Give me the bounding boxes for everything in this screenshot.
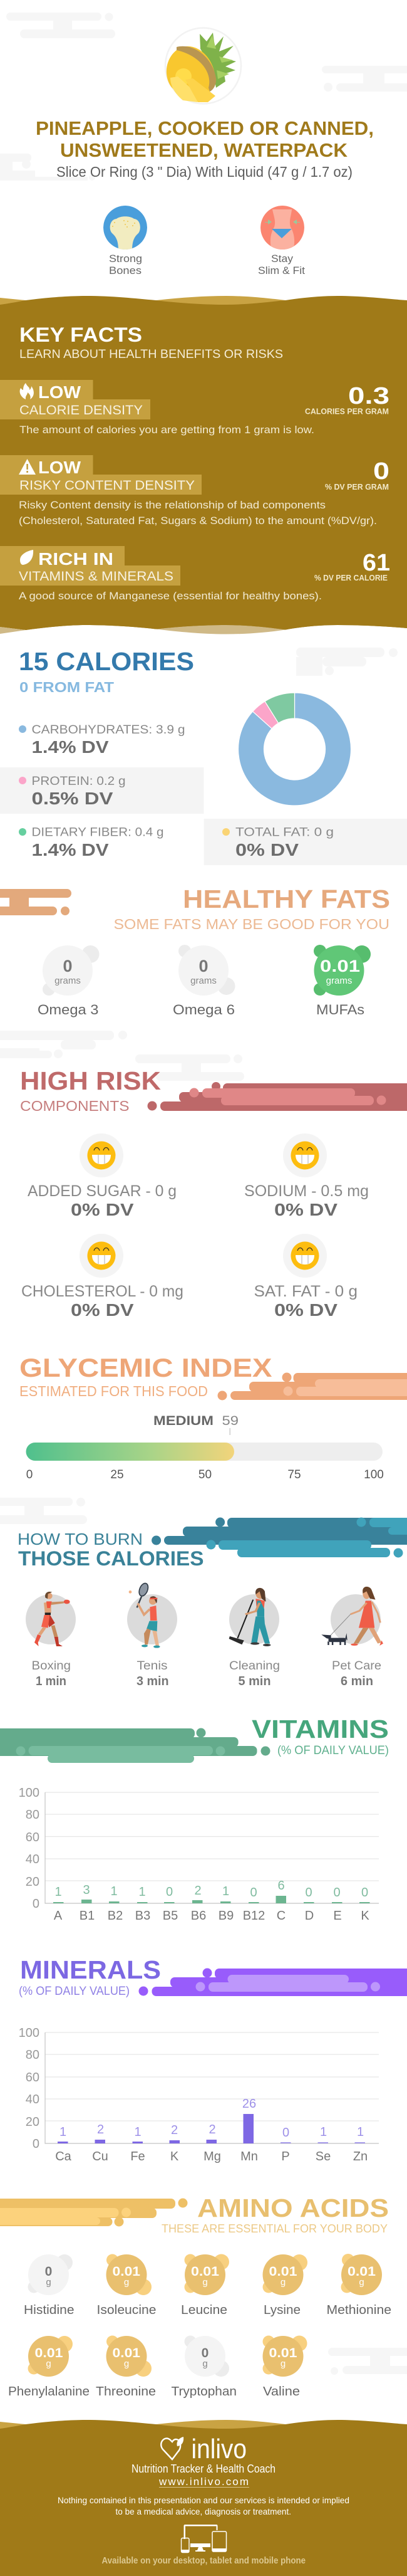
value labels — [59, 2097, 364, 2140]
badge: leucine: g — [202, 2277, 208, 2288]
badge: methionine: 0.01 — [348, 2264, 376, 2279]
bars — [53, 1896, 369, 1903]
y axis labels: 60 — [26, 1831, 39, 1844]
title: PINEAPPLE, COOKED OR CANNED, — [36, 117, 374, 139]
value labels: 1 — [59, 2125, 66, 2139]
badge: histidine — [24, 2254, 74, 2317]
badge: histidine: 0 — [45, 2264, 52, 2279]
category labels: K — [361, 1909, 369, 1923]
label: Tenis — [137, 1659, 168, 1673]
badge: threonine: Threonine — [96, 2385, 156, 2399]
value labels: 2 — [171, 2123, 178, 2137]
badge: lysine: Lysine — [264, 2303, 301, 2317]
item: sodium — [244, 1133, 369, 1219]
badge: omega 3: Omega 3 — [38, 1002, 99, 1017]
heading: 15 calories: 15 CALORIES — [19, 647, 194, 676]
chart: vitamins bar chart — [19, 1786, 379, 1923]
y axis labels: 60 — [26, 2071, 39, 2084]
label: 6 min — [341, 1674, 373, 1688]
y axis labels: 80 — [26, 2048, 39, 2062]
icon: strong bones — [103, 206, 147, 251]
label — [31, 1659, 71, 1688]
badge: methionine — [327, 2254, 391, 2317]
badge: leucine — [181, 2254, 229, 2317]
badge: lysine: g — [281, 2277, 286, 2288]
stat: calories per gram — [305, 383, 389, 416]
y axis labels: 100 — [19, 1786, 39, 1800]
tab label: risky content density: RISKY CONTENT DENSITY — [19, 478, 195, 493]
item: added sugar: 0% DV — [71, 1200, 134, 1219]
icon: desktop, tablet and phone — [182, 2525, 227, 2553]
badge: histidine: g — [46, 2277, 51, 2288]
gauge axis labels: 25 — [110, 1468, 124, 1481]
badge: tryptophan: 0 — [202, 2346, 209, 2360]
chart: minerals bar chart — [19, 2026, 379, 2163]
item: cholesterol: 0% DV — [71, 1300, 134, 1320]
panel: healthy fats — [0, 885, 390, 1017]
description: The amount of calories you are getting from 1 gram is low. — [19, 424, 314, 436]
item: sodium: 0% DV — [274, 1200, 337, 1219]
badge: valine — [263, 2336, 307, 2399]
badge: phenylalanine: g — [46, 2358, 51, 2369]
value labels: 1 — [222, 1885, 229, 1898]
value labels: 3 — [83, 1883, 90, 1897]
value labels: 0 — [333, 1886, 341, 1900]
label: stay slim and fit — [258, 253, 305, 276]
logo: inlivo — [161, 2434, 247, 2464]
subtitle: serving size: Slice Or Ring (3 " Dia) With Liquid (47 g / 1.7 oz) — [56, 164, 353, 180]
heading: key facts: KEY FACTS — [19, 323, 142, 346]
item: cholesterol — [21, 1234, 183, 1320]
label: 3 min — [137, 1674, 169, 1688]
value labels: 2 — [97, 2123, 104, 2137]
item: saturated fat: SAT. FAT - 0 g — [254, 1283, 358, 1300]
item: added sugar: ADDED SUGAR - 0 g — [28, 1182, 177, 1200]
gauge axis labels: 0 — [26, 1468, 33, 1481]
label: 1 min — [36, 1674, 66, 1688]
badge: leucine: 0.01 — [191, 2264, 219, 2279]
description: A good source of Manganese (essential for healthy bones). — [19, 590, 322, 602]
item: cholesterol: CHOLESTEROL - 0 mg — [21, 1283, 183, 1300]
heading: GLYCEMIC INDEX — [19, 1353, 272, 1382]
badge: phenylalanine — [8, 2336, 90, 2399]
activity: cleaning — [229, 1588, 280, 1688]
subheading: ESTIMATED FOR THIS FOOD — [19, 1383, 208, 1399]
decorative band — [218, 1373, 407, 1401]
category labels: K — [170, 2150, 179, 2163]
value labels — [54, 1879, 368, 1900]
fact: risky content density — [0, 455, 389, 527]
heading: AMINO ACIDS — [197, 2194, 389, 2222]
logo: inlivo: inlivo — [192, 2434, 247, 2464]
value label: 59 — [222, 1414, 239, 1428]
badge: phenylalanine: Phenylalanine — [8, 2385, 90, 2399]
gauge bar — [26, 1428, 383, 1461]
value label: MEDIUM — [153, 1414, 214, 1428]
title: UNSWEETENED, WATERPACK — [60, 139, 348, 161]
category labels: B9 — [219, 1909, 234, 1923]
legend: dietary fiber — [19, 825, 164, 860]
stat: % DV per gram: 0 — [373, 458, 389, 485]
category labels: Zn — [353, 2150, 368, 2163]
badge: valine: g — [281, 2358, 286, 2369]
legend: total fat: 0% DV — [235, 840, 299, 860]
icon: tennis player — [129, 1582, 160, 1648]
value labels: 26 — [242, 2097, 256, 2111]
icon: warning triangle — [19, 459, 36, 475]
value labels: 2 — [209, 2123, 216, 2137]
gauge axis labels: 100 — [364, 1468, 384, 1481]
icon: leaf — [20, 550, 33, 565]
legend: protein — [0, 767, 204, 814]
legend: total fat: TOTAL FAT: 0 g — [235, 825, 334, 839]
y axis labels — [19, 1786, 39, 1911]
badge: isoleucine: Isoleucine — [96, 2303, 157, 2317]
label: strong bones — [109, 253, 142, 276]
category labels — [55, 2150, 368, 2163]
badge: MUFAs: 0.01 — [320, 957, 360, 975]
item: added sugar — [28, 1133, 177, 1219]
subheading: 0 from fat: 0 FROM FAT — [19, 679, 114, 695]
decorative band — [139, 1969, 407, 1996]
subheading: SOME FATS MAY BE GOOD FOR YOU — [114, 916, 389, 932]
badge: tryptophan — [172, 2336, 237, 2399]
stat: % DV per calorie: % DV PER CALORIE — [314, 574, 388, 582]
category labels: P — [281, 2150, 290, 2163]
title — [36, 117, 374, 161]
heading: VITAMINS — [252, 1715, 389, 1743]
y axis labels: 100 — [19, 2026, 39, 2040]
legend: carbohydrates: 1.4% DV — [31, 737, 109, 757]
badge: isoleucine: 0.01 — [113, 2264, 140, 2279]
badge: MUFAs: grams — [326, 975, 352, 986]
fact: rich in vitamins and minerals — [0, 546, 390, 602]
legend: total fat — [204, 819, 407, 865]
tagline: Nutrition Tracker & Health Coach — [131, 2463, 276, 2475]
heading: MINERALS — [20, 1955, 161, 1984]
value labels: 0 — [282, 2126, 289, 2140]
subheading: COMPONENTS — [20, 1098, 130, 1114]
y axis labels: 40 — [26, 2093, 39, 2106]
value labels: 1 — [138, 1885, 146, 1899]
activity: boxing — [26, 1592, 76, 1688]
category labels: Se — [316, 2150, 331, 2163]
category labels: E — [333, 1909, 342, 1923]
stat: % DV per calorie — [314, 550, 390, 582]
panel: glycemic index — [19, 1353, 407, 1481]
y axis labels: 20 — [26, 2115, 39, 2129]
badge: threonine: g — [124, 2358, 129, 2369]
activity: pet care — [321, 1587, 383, 1688]
panel: minerals — [19, 1955, 407, 2163]
y axis labels: 20 — [26, 1875, 39, 1889]
category labels: B5 — [163, 1909, 178, 1923]
value labels: 1 — [54, 1885, 62, 1899]
category labels: D — [305, 1909, 314, 1923]
category labels: B6 — [191, 1909, 206, 1923]
value labels: 0 — [250, 1886, 257, 1900]
heading: HEALTHY FATS — [183, 885, 390, 913]
badge: omega 6: grams — [190, 975, 217, 986]
label: stay slim and fit: Stay — [271, 253, 293, 265]
item: sodium: SODIUM - 0.5 mg — [244, 1182, 369, 1200]
badge: isoleucine — [96, 2254, 157, 2317]
label: 5 min — [238, 1674, 270, 1688]
item: saturated fat: 0% DV — [274, 1300, 337, 1320]
bars — [58, 2114, 365, 2143]
panel: amino acids — [0, 2194, 391, 2399]
label: Cleaning — [229, 1659, 280, 1673]
value labels: 1 — [134, 2125, 142, 2139]
panel: how to burn those calories — [18, 1517, 407, 1688]
heading: HIGH RISK — [20, 1066, 161, 1095]
item: saturated fat — [254, 1234, 358, 1320]
icon: boxer — [34, 1592, 70, 1646]
y axis labels: 0 — [33, 2137, 39, 2151]
subheading: (% OF DAILY VALUE) — [19, 1985, 130, 1998]
value labels: 1 — [110, 1885, 118, 1898]
badge: histidine: Histidine — [24, 2303, 74, 2317]
stat: % DV per calorie: 61 — [363, 550, 390, 576]
label: strong bones: Strong — [109, 253, 142, 265]
badge: omega 6 — [173, 945, 235, 1017]
gauge axis labels: 75 — [287, 1468, 301, 1481]
subheading: THESE ARE ESSENTIAL FOR YOUR BODY — [162, 2222, 388, 2235]
badge: methionine: g — [359, 2277, 364, 2288]
heading: THOSE CALORIES — [18, 1547, 204, 1570]
badge: valine: 0.01 — [269, 2346, 297, 2360]
decorative band — [0, 889, 71, 915]
label: Pet Care — [332, 1659, 381, 1673]
stat: calories per gram: CALORIES PER GRAM — [305, 407, 389, 416]
badge: MUFAs — [314, 945, 371, 1017]
category labels: B1 — [80, 1909, 95, 1923]
badge: omega 3: 0 — [63, 957, 73, 975]
footer — [0, 2420, 407, 2576]
fact: calorie density — [0, 380, 389, 436]
description: Risky Content density is the relationship of bad components — [19, 499, 326, 511]
category labels: Fe — [130, 2150, 145, 2163]
value label: rich in: RICH IN — [38, 549, 113, 569]
gauge axis labels — [26, 1468, 384, 1481]
description: (Cholesterol, Saturated Fat, Sugars & Sodium) to the amount (%DV/gr). — [19, 515, 377, 527]
badge: tryptophan: g — [202, 2358, 208, 2369]
icon: flame — [20, 383, 34, 399]
stat: % DV per gram: % DV PER GRAM — [325, 483, 389, 492]
tab label: vitamins and minerals: VITAMINS & MINERALS — [19, 569, 173, 584]
y axis labels: 80 — [26, 1808, 39, 1822]
disclaimer: to be a medical advice, diagnosis or treatment. — [115, 2506, 291, 2516]
legend: protein: PROTEIN: 0.2 g — [31, 774, 125, 788]
legend: protein: 0.5% DV — [31, 789, 113, 808]
label — [229, 1659, 280, 1688]
icon: person sweeping — [229, 1588, 270, 1646]
badge: MUFAs: MUFAs — [316, 1002, 364, 1017]
panel: high risk components — [20, 1066, 407, 1320]
value labels: 0 — [305, 1886, 312, 1900]
legend: carbohydrates — [19, 723, 185, 757]
decorative band — [148, 1082, 407, 1111]
label — [137, 1659, 169, 1688]
label — [332, 1659, 381, 1688]
badge: lysine: 0.01 — [269, 2264, 297, 2279]
decorative band — [0, 2198, 188, 2227]
badge: threonine — [96, 2336, 156, 2399]
panel: calories — [0, 647, 407, 865]
legend: carbohydrates: CARBOHYDRATES: 3.9 g — [31, 723, 185, 737]
description — [19, 499, 377, 527]
value labels: 0 — [361, 1886, 368, 1900]
panel: vitamins — [0, 1715, 389, 1923]
badge: valine: Valine — [263, 2385, 300, 2399]
badge: isoleucine: g — [124, 2277, 129, 2288]
stat: calories per gram: 0.3 — [348, 383, 389, 409]
disclaimer: Nothing contained in this presentation and our services is intended or implied — [58, 2495, 349, 2505]
badge: leucine: Leucine — [181, 2303, 227, 2317]
category labels: C — [277, 1909, 286, 1923]
badge: omega 6: Omega 6 — [173, 1002, 235, 1017]
gauge axis labels: 50 — [198, 1468, 212, 1481]
value label: low: LOW — [38, 382, 81, 402]
website link: www.inlivo.com — [158, 2476, 249, 2488]
category labels: Cu — [92, 2150, 108, 2163]
y axis labels — [19, 2026, 39, 2151]
badge: omega 6: 0 — [198, 957, 209, 975]
value labels: 0 — [166, 1885, 173, 1899]
label: Boxing — [31, 1659, 71, 1673]
stat: % DV per gram — [325, 458, 389, 492]
decorative band — [152, 1517, 407, 1557]
subheading: (% OF DAILY VALUE) — [277, 1744, 389, 1757]
category labels: B3 — [135, 1909, 150, 1923]
icon: person walking dog — [321, 1587, 383, 1646]
legend: dietary fiber: DIETARY FIBER: 0.4 g — [31, 825, 164, 839]
heading: HOW TO BURN — [18, 1530, 143, 1548]
category labels: A — [54, 1909, 63, 1923]
badge: methionine: Methionine — [327, 2303, 391, 2317]
badge: lysine — [263, 2254, 307, 2317]
icon: stay slim and fit — [260, 206, 304, 251]
y axis labels: 0 — [33, 1897, 39, 1911]
badge: omega 3: grams — [54, 975, 81, 986]
decorative band — [0, 1728, 270, 1763]
category labels: Mg — [204, 2150, 221, 2163]
badge: phenylalanine: 0.01 — [35, 2346, 63, 2360]
category labels: Ca — [55, 2150, 72, 2163]
value label: low: LOW — [38, 458, 81, 477]
heading — [18, 1530, 204, 1570]
value label — [153, 1414, 239, 1428]
icon: pineapple photo — [165, 28, 241, 104]
activity: tennis — [127, 1582, 177, 1688]
availability note: Available on your desktop, tablet and mobile phone — [101, 2555, 306, 2566]
label: stay slim and fit: Slim & Fit — [258, 265, 305, 276]
category labels: Mn — [240, 2150, 258, 2163]
tab label: calorie density: CALORIE DENSITY — [19, 403, 143, 418]
chart: macronutrient donut — [239, 693, 351, 806]
y axis labels: 40 — [26, 1853, 39, 1866]
heading: key facts — [19, 323, 283, 361]
value labels: 1 — [357, 2125, 364, 2139]
disclaimer — [58, 2495, 349, 2516]
category labels: B12 — [243, 1909, 265, 1923]
badge: tryptophan: Tryptophan — [172, 2385, 237, 2399]
panel: key facts — [0, 296, 407, 634]
heading: key facts: LEARN ABOUT HEALTH BENEFITS OR RISKS — [19, 348, 283, 361]
category labels — [54, 1909, 369, 1923]
value labels: 2 — [194, 1884, 202, 1898]
legend: dietary fiber: 1.4% DV — [31, 840, 109, 860]
badge: threonine: 0.01 — [113, 2346, 140, 2360]
value labels: 1 — [320, 2125, 327, 2139]
badge: omega 3 — [38, 945, 99, 1017]
category labels: B2 — [108, 1909, 123, 1923]
value labels: 6 — [277, 1879, 285, 1893]
label: strong bones: Bones — [109, 265, 142, 276]
